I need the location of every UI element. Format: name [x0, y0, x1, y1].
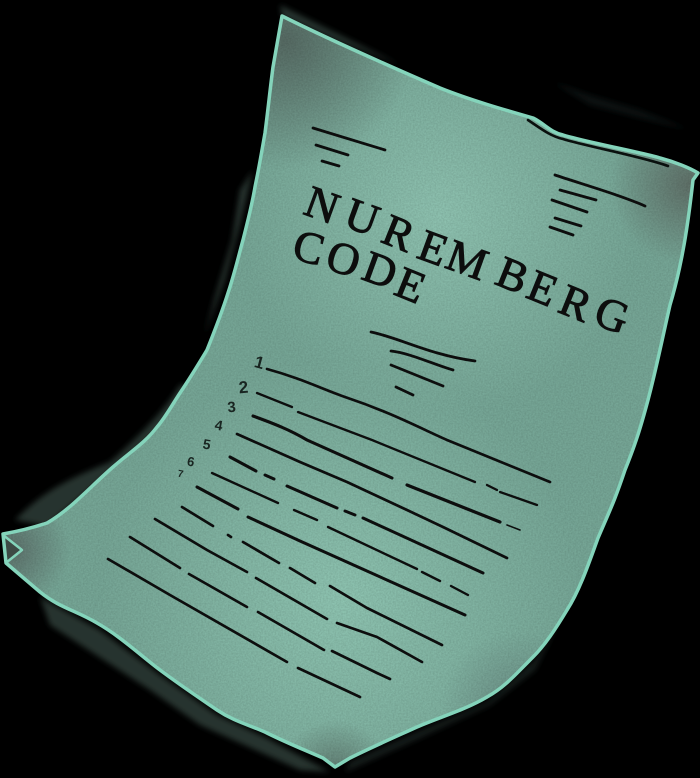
list numbers: 3 [227, 399, 237, 416]
title: Nuremberg Code: C [288, 219, 330, 276]
title: Nuremberg Code: U [338, 188, 386, 246]
list numbers: 2 [238, 378, 249, 397]
title: Nuremberg Code: M [440, 230, 494, 290]
list numbers: 6 [186, 454, 196, 470]
title: Nuremberg Code: E [389, 257, 433, 313]
list numbers: 5 [202, 436, 212, 453]
title: Nuremberg Code: G [588, 286, 636, 344]
title: Nuremberg Code: N [298, 176, 346, 234]
list numbers: 4 [214, 417, 224, 434]
title: Nuremberg Code: E [412, 220, 455, 276]
title: Nuremberg Code: B [489, 246, 536, 304]
list numbers: 1 [252, 352, 266, 373]
folded corner [3, 535, 22, 562]
list text lines [108, 369, 550, 697]
torn top edge shadow [528, 120, 668, 166]
title: Nuremberg Code [288, 176, 636, 344]
list numbers: 7 [177, 469, 185, 481]
header marks: below title [371, 332, 475, 395]
title: Nuremberg Code: E [521, 260, 565, 316]
title: Nuremberg Code: O [320, 230, 367, 288]
header marks: top left [313, 128, 385, 166]
list numbers [177, 352, 266, 481]
header marks: top right [550, 175, 645, 235]
title: Nuremberg Code: D [356, 241, 404, 299]
title: Nuremberg Code: R [552, 274, 599, 332]
title: Nuremberg Code: R [375, 204, 422, 262]
